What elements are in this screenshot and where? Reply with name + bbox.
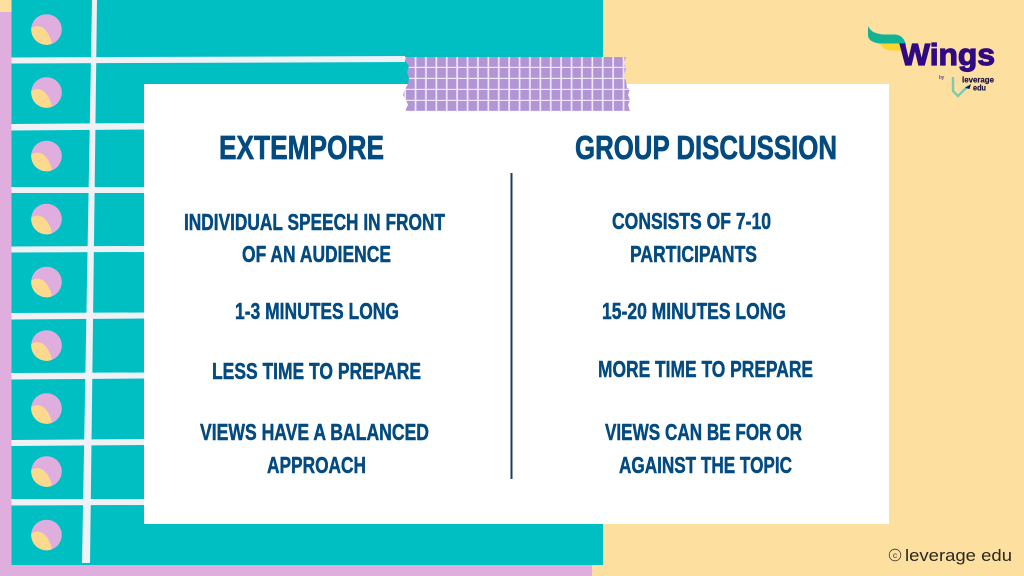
extempore points: INDIVIDUAL SPEECH IN FRONT [184,209,445,235]
extempore points: VIEWS HAVE A BALANCED [200,419,429,445]
extempore points: 1-3 MINUTES LONG [235,298,399,324]
teal notebook panel [12,0,603,565]
extempore points [184,209,445,478]
group discussion points: MORE TIME TO PREPARE [598,356,813,382]
binder hole 9 [31,520,62,550]
logo: wings by leverage edu: Wings [900,37,995,72]
heading: group discussion: GROUP DISCUSSION [575,129,837,166]
extempore points: LESS TIME TO PREPARE [212,358,421,384]
group discussion points [598,208,813,478]
group discussion points: CONSISTS OF 7-10 [612,208,771,234]
logo: wings by leverage edu: by [939,75,945,81]
washi tape [403,57,630,111]
white notebook grid lines [12,0,405,563]
heading: extempore: EXTEMPORE [219,129,384,166]
white content card [144,84,889,524]
binder hole 2 [31,77,62,108]
binder hole 7 [31,393,62,424]
lilac border strip [0,12,592,576]
binder hole 5 [31,267,62,297]
extempore points: APPROACH [267,452,366,478]
logo: wings by leverage edu [868,26,995,96]
group discussion points: PARTICIPANTS [630,241,757,267]
copyright mark: leverage edu [905,546,1012,565]
copyright mark: c [893,550,898,560]
binder hole 4 [31,204,62,234]
binder hole 8 [31,456,62,487]
group discussion points: AGAINST THE TOPIC [619,452,792,478]
binder hole 3 [31,141,62,171]
logo: wings by leverage edu: leverage [962,76,995,84]
center divider [510,173,512,479]
extempore points: OF AN AUDIENCE [242,241,391,267]
binder hole 1 [31,14,62,45]
binder hole 6 [31,330,62,361]
group discussion points: 15-20 MINUTES LONG [602,298,786,324]
logo: wings by leverage edu: edu [973,84,986,92]
group discussion points: VIEWS CAN BE FOR OR [605,419,802,445]
